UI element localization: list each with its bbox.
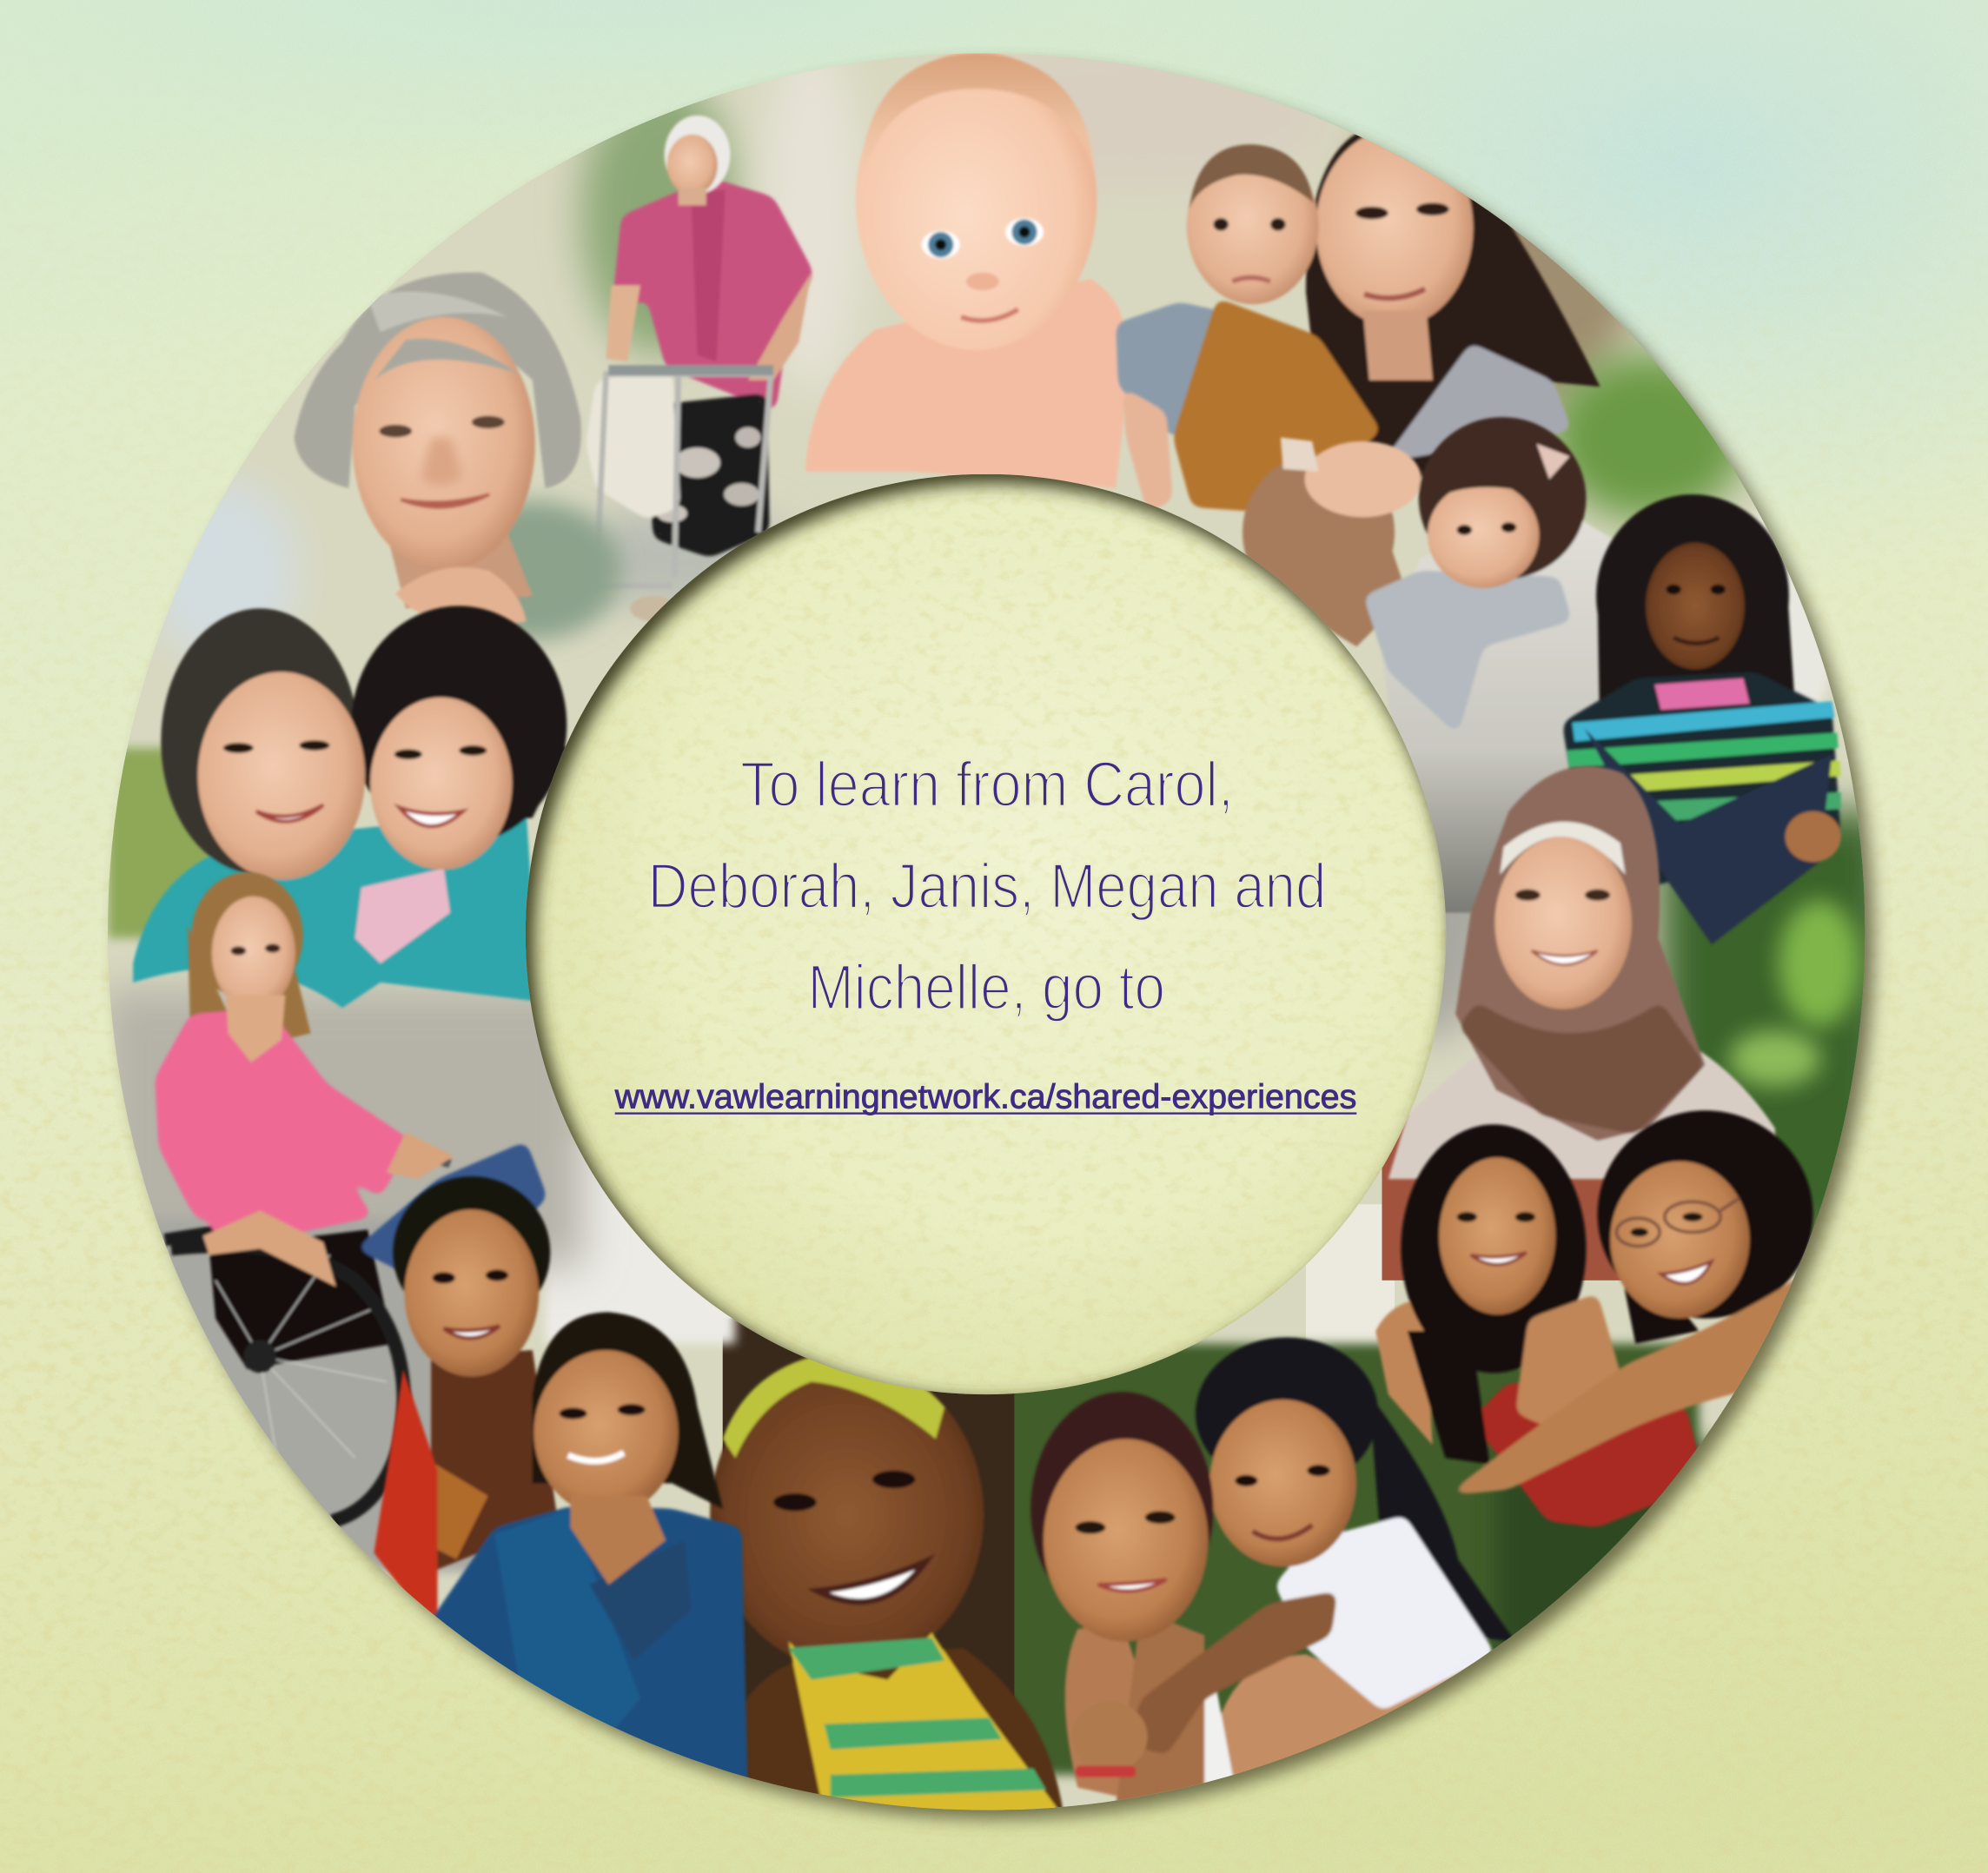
- invitation heading: Michelle, go to: [808, 953, 1165, 1023]
- photo: smiling young woman with beaded necklace: [710, 1353, 1065, 1825]
- photo: baby: [805, 50, 1130, 488]
- invitation heading: To learn from Carol,: [740, 750, 1234, 820]
- photo: mother holding toddler boy: [1116, 129, 1600, 513]
- invitation heading: Deborah, Janis, Megan and: [648, 851, 1326, 922]
- photo: girl in brown hijab: [1388, 766, 1775, 1179]
- photo: Asian mother and daughter embracing: [133, 606, 567, 1008]
- inner circle text panel: [520, 469, 1464, 1413]
- photo: two women in saris: [374, 1176, 748, 1800]
- photo: two smiling women hugging: [1375, 1110, 1813, 1527]
- invitation heading: [648, 750, 1326, 1023]
- photo: two girls hugging: [1242, 417, 1623, 913]
- website link: www.vawlearningnetwork.ca/shared-experiences: [614, 1078, 1356, 1115]
- photo: woman in wheelchair: [155, 872, 547, 1521]
- photo: elderly woman with walker: [586, 116, 814, 621]
- photo: mother carrying daughter: [1030, 1337, 1521, 1813]
- photo: girl in striped sweater with book: [1562, 494, 1841, 944]
- photo: grey-haired woman smiling: [295, 273, 621, 640]
